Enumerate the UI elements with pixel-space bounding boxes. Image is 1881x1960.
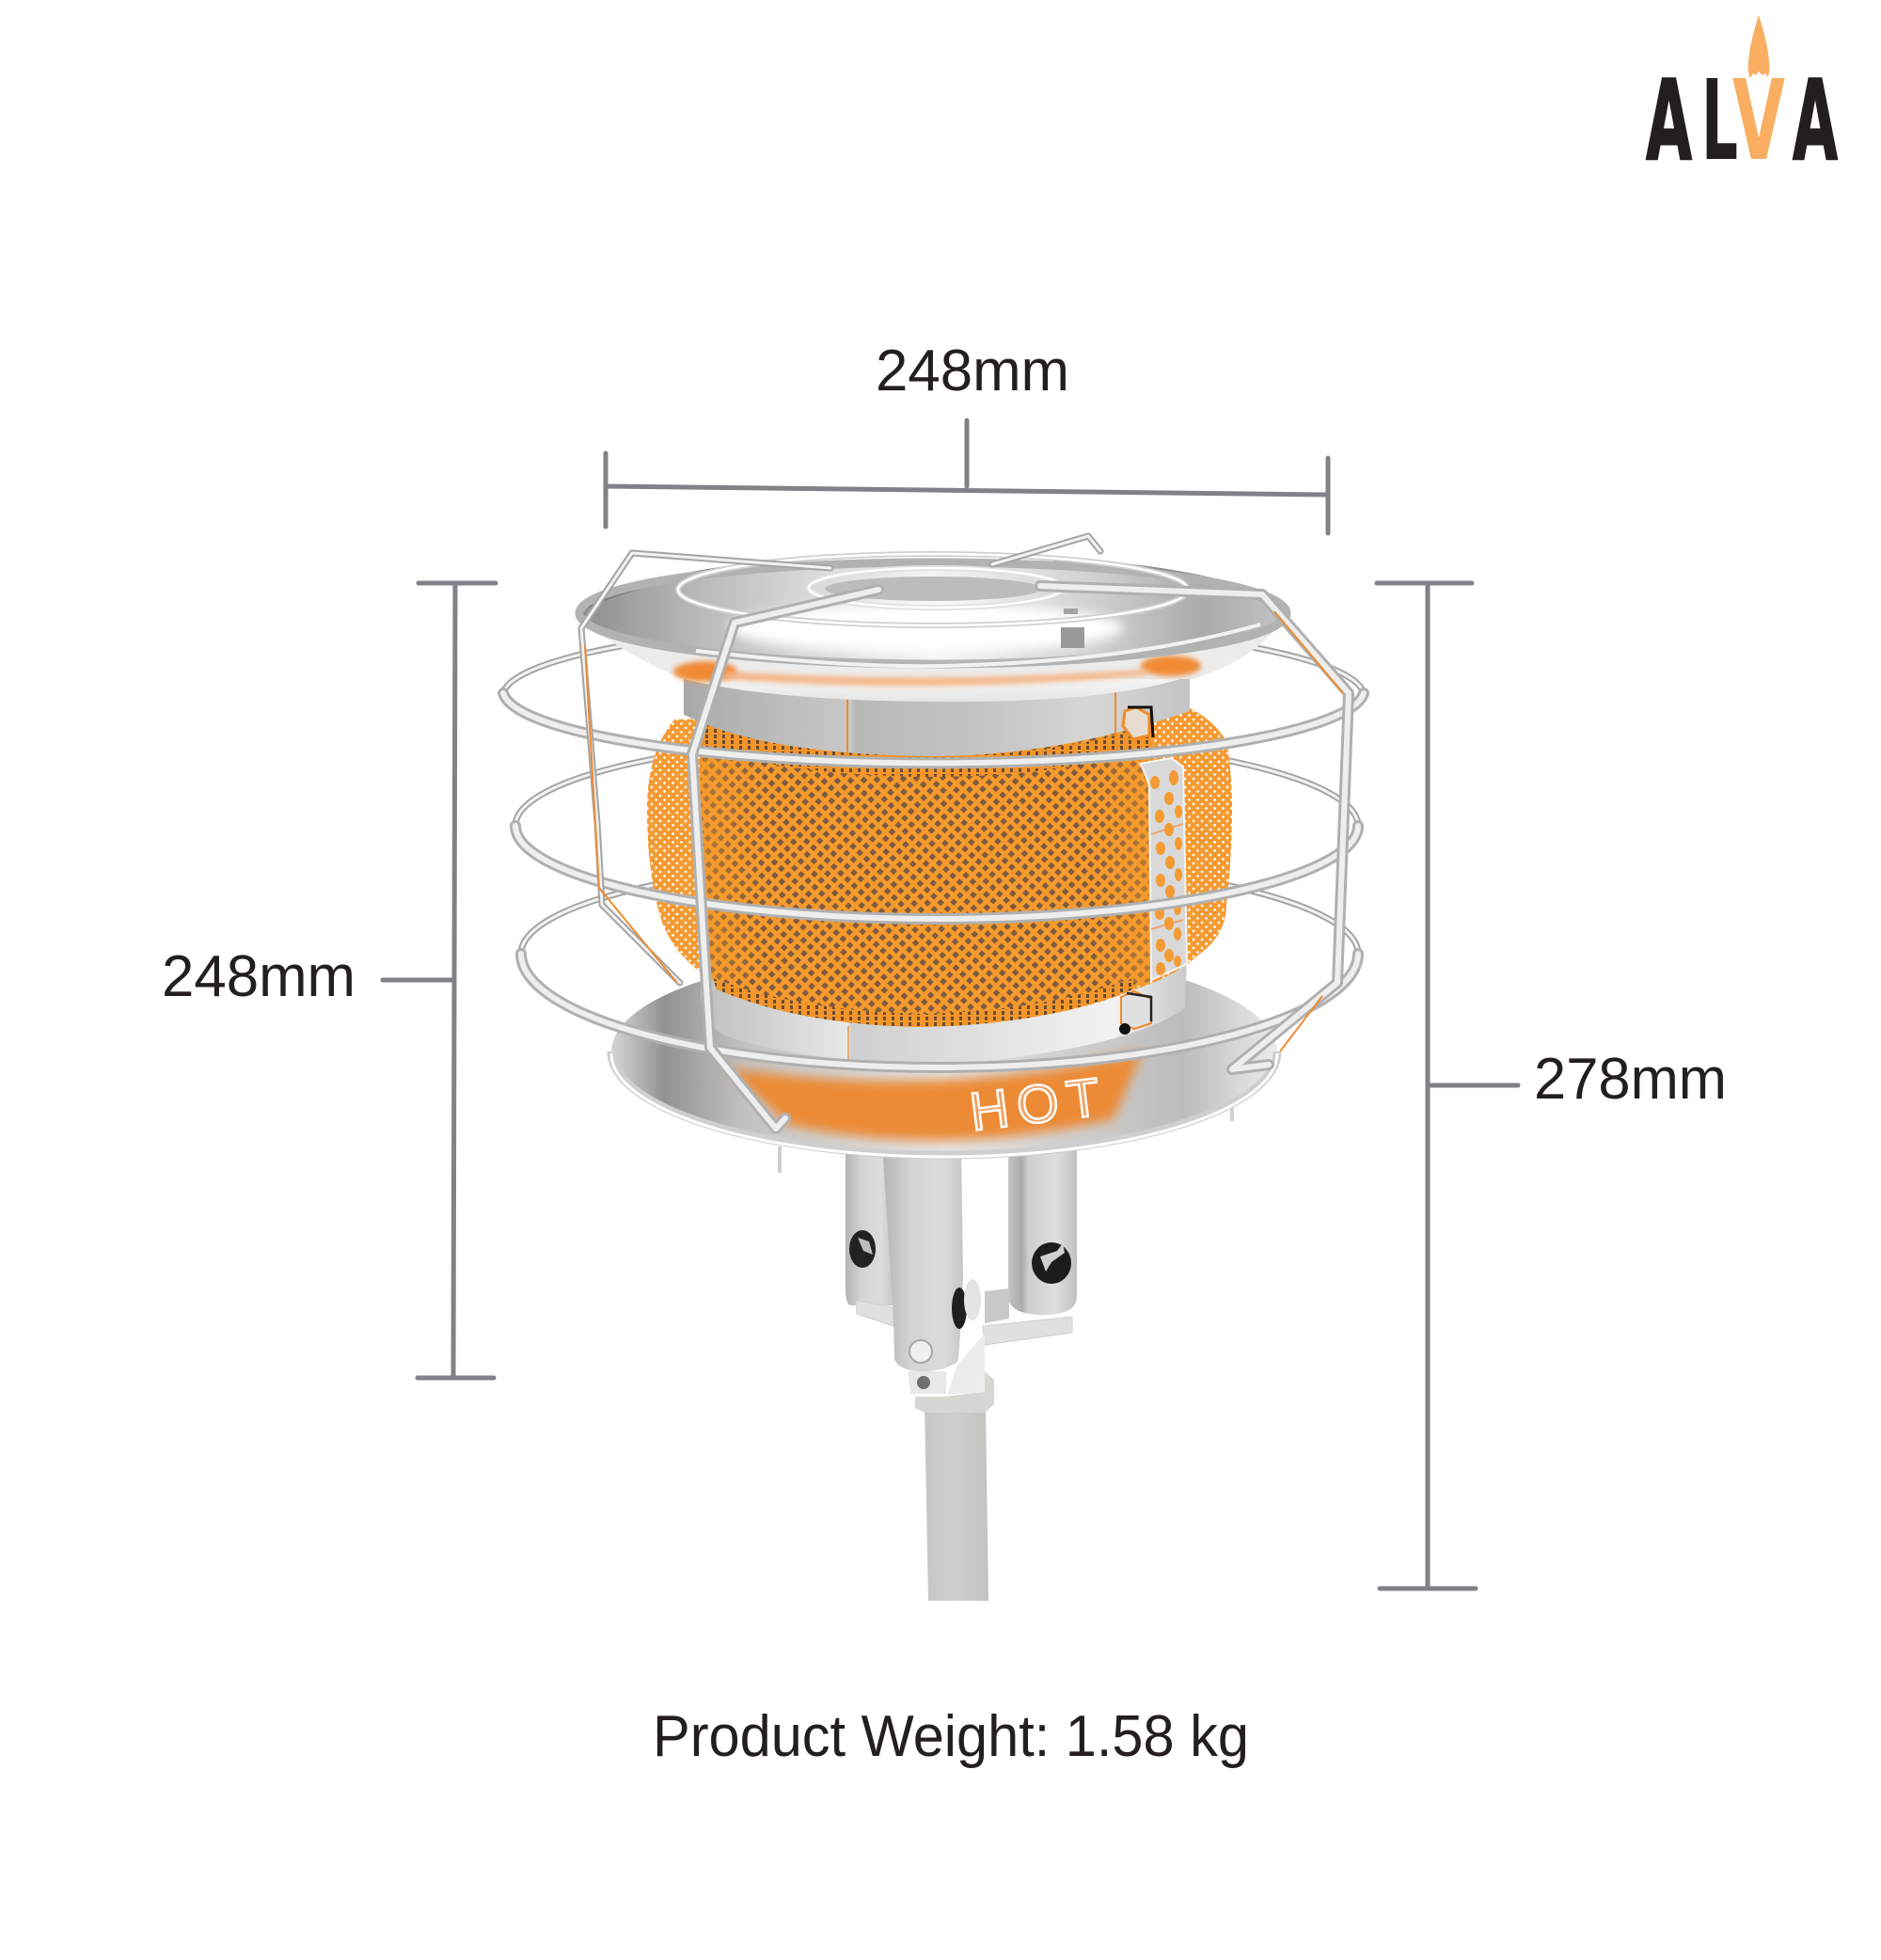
upper cylinder (684, 663, 1190, 756)
curved bracket (947, 1334, 985, 1395)
underside heat left (673, 661, 737, 682)
hex nut (915, 1371, 994, 1413)
ring back lower (521, 860, 1358, 954)
mesh top dense row (701, 722, 1152, 777)
dimension: height right (1377, 583, 1727, 1589)
left strut (581, 553, 830, 983)
cylinder wall (701, 959, 1187, 1065)
cylinder seam (847, 1026, 849, 1060)
inner wire ring (809, 568, 1063, 608)
mesh edge tint left (701, 752, 767, 978)
bolt bracket (1128, 707, 1153, 737)
screw right (1032, 1242, 1071, 1284)
label: 248mm left: 248mm (162, 944, 356, 1009)
top right strut (992, 536, 1100, 564)
rim highlight (696, 624, 1260, 666)
bright glare on disc (729, 604, 1124, 653)
disc plate (577, 561, 1288, 666)
dimension: height left (162, 583, 496, 1378)
logo letter V: V (1732, 55, 1785, 185)
strap joints (1151, 824, 1183, 929)
outer wire ring (678, 554, 1188, 625)
disc rim (611, 1051, 1277, 1155)
inner gray (825, 577, 1041, 601)
mesh cover (647, 708, 1232, 1027)
dimension: width top (606, 339, 1328, 533)
pole (925, 1406, 988, 1601)
right strut (1040, 586, 1349, 1069)
silver screw (909, 1340, 932, 1363)
label: 248mm top: 248mm (876, 339, 1069, 403)
back of rim dark (587, 561, 799, 606)
upper disc (577, 554, 1288, 686)
logo flame (1748, 15, 1769, 78)
rim (579, 562, 1287, 664)
underside heat band (724, 670, 1147, 686)
mesh bottom dense row (713, 978, 1133, 1027)
small block cap (1064, 609, 1078, 614)
rear wire segments (503, 624, 1364, 954)
small block (1061, 627, 1084, 648)
bolt body (1123, 707, 1149, 739)
ring back middle (515, 735, 1358, 826)
lower bolt (1119, 991, 1151, 1035)
strap holes (1150, 770, 1182, 975)
left dimension bracket (383, 583, 496, 1378)
bracket arms (856, 1301, 1072, 1345)
right dimension bracket (1377, 583, 1518, 1589)
lower ring front (521, 954, 1358, 1067)
heater illustration (503, 536, 1364, 1601)
front strut (692, 590, 878, 1129)
front wire cage (503, 536, 1364, 1129)
disc plate (611, 948, 1277, 1155)
label: 278mm: 278mm (1534, 1047, 1727, 1112)
upper bolt (1123, 707, 1153, 739)
right tube (1008, 1143, 1077, 1315)
logo letter L: L (1701, 55, 1738, 185)
mesh outer bulges (647, 708, 1232, 1026)
HOT embossed text: HOT (967, 1066, 1112, 1143)
right strut orange edge (1274, 611, 1343, 1051)
cylinder shoulder (684, 655, 1193, 702)
mesh front panel (701, 715, 1152, 1026)
logo: ALVA (1646, 15, 1838, 185)
screw left (849, 1230, 876, 1268)
logo letter A first: A (1646, 55, 1692, 185)
cylinder seam (847, 684, 1115, 755)
disc orange heat glow (726, 1051, 1143, 1141)
collar (908, 1371, 946, 1394)
bolt bracket (1127, 993, 1151, 1021)
left tube (846, 1143, 893, 1305)
strap body (1140, 758, 1187, 980)
middle ring front (515, 826, 1358, 919)
centre tube (882, 1143, 963, 1371)
pole and mount (846, 1143, 1077, 1601)
upper ring front (503, 693, 1364, 763)
disc legs (780, 1103, 1232, 1173)
cylinder body (684, 663, 1190, 756)
bolt head (1121, 991, 1151, 1029)
left strut orange edge (585, 646, 677, 983)
bolt nut (1119, 1023, 1130, 1035)
hex socket (917, 1376, 930, 1389)
rear bracket plate (985, 1288, 1009, 1323)
perforated strap (1140, 758, 1187, 980)
product weight text: Product Weight: 1.58 kg (653, 1704, 1249, 1769)
ring back upper (503, 624, 1364, 693)
screw centre (952, 1279, 981, 1329)
logo letter A second: A (1793, 55, 1838, 185)
lower disc (611, 948, 1277, 1173)
disc underside (585, 621, 1283, 679)
mesh edge tint right (1091, 752, 1149, 983)
top dimension bracket (606, 420, 1328, 533)
underside heat right (1141, 656, 1201, 676)
lower cylinder (701, 959, 1187, 1065)
